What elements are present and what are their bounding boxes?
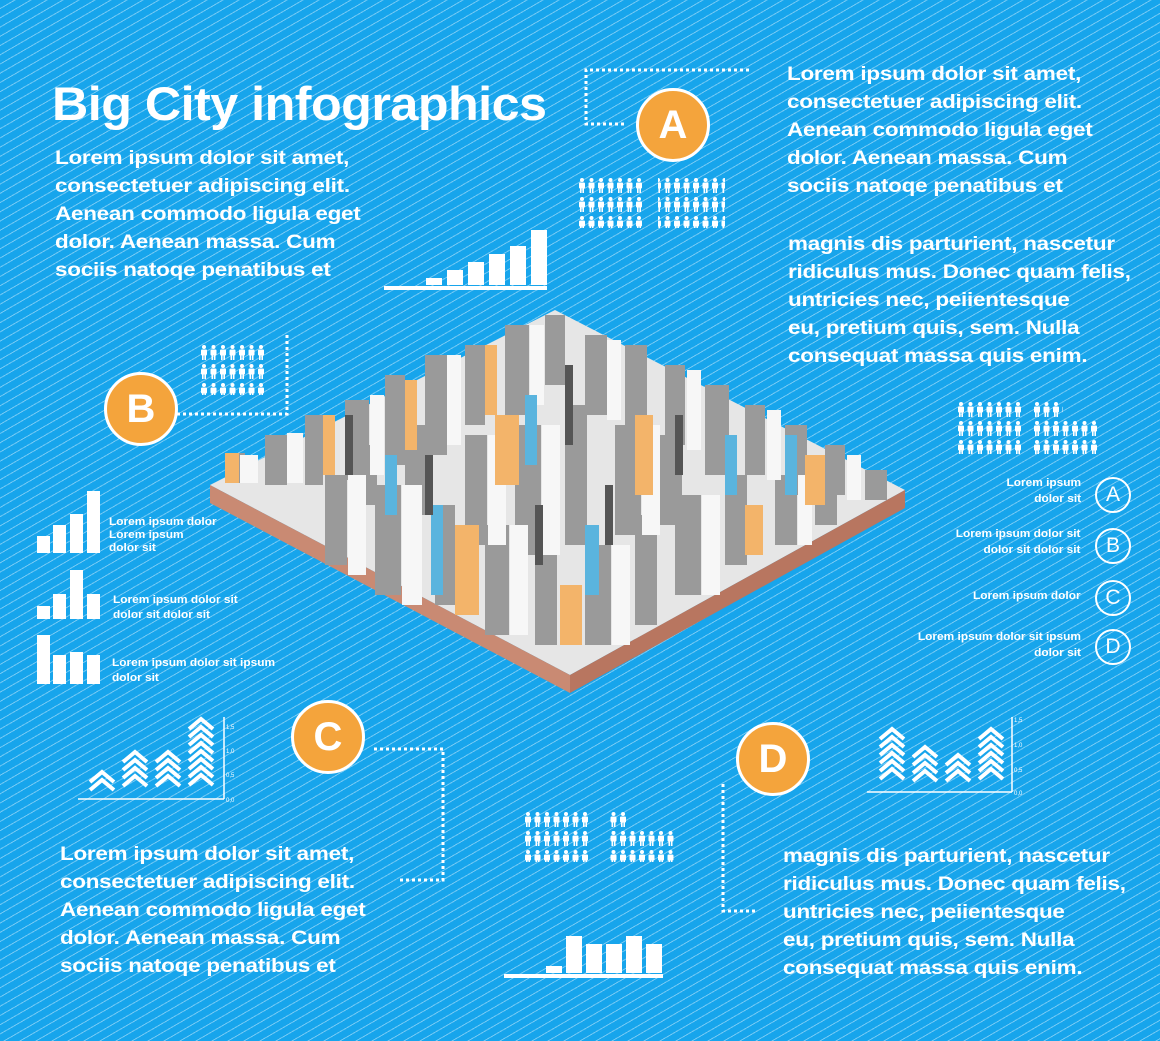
chevron chart right: 1,5 [1014,718,1023,724]
text block D: consequat massa quis enim. [783,957,1082,979]
badge A: A [659,103,687,147]
bar chart bottom [504,936,663,978]
legend: A [1106,483,1120,506]
text: consequat massa quis enim. [788,345,1087,367]
text block: intro: dolor. Aenean massa. Cum [55,231,335,253]
text block A [787,63,1093,197]
chevron chart left: 0,5 [226,773,235,779]
bar charts left [37,491,275,684]
badge D: D [759,737,787,781]
people icons right [958,402,1097,454]
text block D: eu, pretium quis, sem. Nulla [783,929,1074,951]
legend item B: dolor sit dolor sit [984,544,1081,556]
text block C [60,843,366,977]
legend: C [1105,586,1121,609]
bar charts left: Lorem ipsum dolor [109,516,217,528]
text block D: magnis dis parturient, nascetur [783,845,1110,867]
legend item C: Lorem ipsum dolor [973,590,1081,602]
chevron chart right [867,717,1023,797]
dotted connector A [584,68,749,126]
legend item A [1006,477,1081,505]
text block A: sociis natoqe penatibus et [787,175,1063,197]
text: untricies nec, peiientesque [788,289,1070,311]
text block: intro: Aenean commodo ligula eget [55,203,361,225]
legend item D [918,631,1081,659]
text block A: Aenean commodo ligula eget [787,119,1093,141]
badge C [291,700,365,774]
legend item D: dolor sit [1034,647,1081,659]
legend: B [1106,534,1120,557]
legend item A: dolor sit [1034,493,1081,505]
text block D: ridiculus mus. Donec quam felis, [783,873,1126,895]
chevron chart left [78,716,235,804]
bar chart 3 [37,635,100,684]
chevron chart left: 1,0 [226,749,235,755]
bar chart 2 [37,570,100,619]
text block C: dolor. Aenean massa. Cum [60,927,340,949]
chevron chart left: 1,5 [226,725,235,731]
legend item B [956,528,1081,556]
chevron chart right: 0,0 [1014,791,1023,797]
bar charts left: Lorem ipsum [109,529,184,541]
text block D: untricies nec, peiientesque [783,901,1065,923]
badge A [636,88,710,162]
badge B: B [127,387,155,431]
text: magnis dis parturient, nascetur [788,233,1115,255]
text block A: Lorem ipsum dolor sit amet, [787,63,1081,85]
city map [210,310,905,693]
dotted connector D [722,784,755,912]
text block: intro: consectetuer adipiscing elit. [55,175,350,197]
dotted connector C [374,748,444,882]
legend item D: Lorem ipsum dolor sit ipsum [918,631,1081,643]
badge D [736,722,810,796]
text block: intro: sociis natoqe penatibus et [55,259,331,281]
legend [918,477,1131,665]
legend item B: Lorem ipsum dolor sit [956,528,1081,540]
text block: intro [55,147,361,281]
text: eu, pretium quis, sem. Nulla [788,317,1079,339]
text block D [783,845,1126,979]
bar charts left: Lorem ipsum dolor sit [113,594,238,606]
text: ridiculus mus. Donec quam felis, [788,261,1131,283]
badge C: C [314,715,342,759]
bar charts left: dolor sit [112,672,159,684]
chevron chart left: 0,0 [226,798,235,804]
text block C: Aenean commodo ligula eget [60,899,366,921]
legend item A: Lorem ipsum [1006,477,1081,489]
legend: D [1105,635,1121,658]
title: Big City infographics [52,77,546,130]
bar charts left: dolor sit dolor sit [113,609,210,621]
bar charts left: Lorem ipsum dolor sit ipsum [112,657,275,669]
text block C: consectetuer adipiscing elit. [60,871,355,893]
dotted connector B [178,335,288,416]
text block C: Lorem ipsum dolor sit amet, [60,843,354,865]
people icons A [579,178,725,228]
people icons B [201,345,264,395]
text block C: sociis natoqe penatibus et [60,955,336,977]
chevron chart right: 1,0 [1014,743,1023,749]
bar chart 1 [37,491,100,553]
chevron chart right: 0,5 [1014,768,1023,774]
people icons bottom [525,812,674,862]
text block: intro: Lorem ipsum dolor sit amet, [55,147,349,169]
bar charts left: dolor sit [109,542,156,554]
text block A: consectetuer adipiscing elit. [787,91,1082,113]
badge B [104,372,178,446]
text block A: dolor. Aenean massa. Cum [787,147,1067,169]
bar chart: top stepped [384,230,547,290]
